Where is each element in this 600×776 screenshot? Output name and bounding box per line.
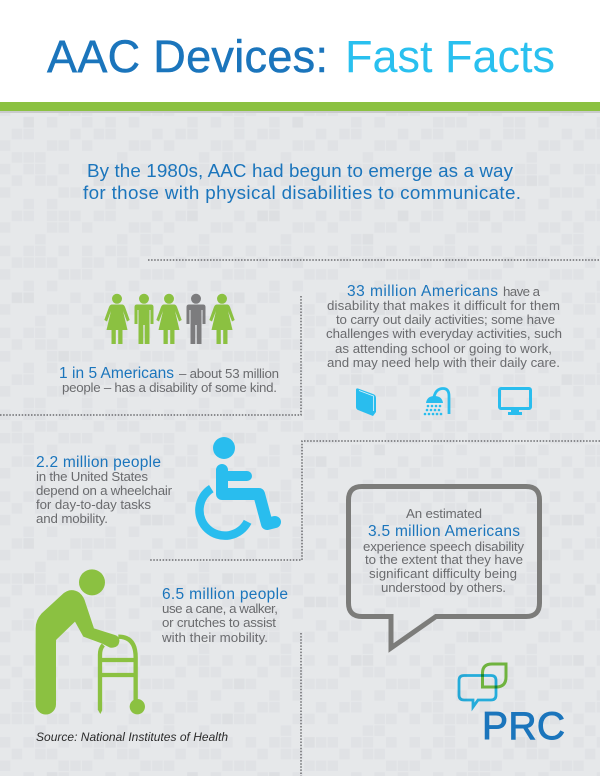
callout text: to the extent that they have	[365, 552, 523, 567]
icon: computer monitor	[500, 388, 530, 415]
text: 33 million Americans: have a	[503, 284, 541, 299]
dotted dividers	[0, 260, 600, 776]
logo wordmark: PRC	[482, 705, 565, 748]
logo speech bubble	[459, 676, 496, 707]
text: 1 in 5 Americans: – about 53 million	[179, 366, 279, 381]
title: Fast Facts	[345, 31, 555, 82]
text: 6.5 million people: 6.5 million people	[162, 586, 288, 603]
intro text: By the 1980s, AAC had begun to emerge as a way	[87, 160, 514, 181]
callout text: experience speech disability	[363, 539, 524, 554]
text: 33 million Americans: as attending school or going to work,	[335, 341, 552, 356]
text: 6.5 million people: use a cane, a walker,	[162, 601, 278, 616]
text: 33 million Americans: to carry out daily activities; some have	[336, 312, 555, 327]
callout text: 3.5 million Americans	[368, 523, 520, 540]
woman 1	[104, 294, 130, 344]
PRC logo	[459, 664, 565, 748]
icon: book	[356, 388, 376, 416]
speech bubble callout	[348, 486, 540, 648]
text: 2.2 million people: depend on a wheelchair	[36, 483, 173, 498]
man 4 grey	[186, 294, 206, 344]
intro text	[83, 160, 521, 203]
callout text: significant difficulty being	[369, 566, 517, 581]
text: 33 million Americans: and may need help with their daily care.	[327, 355, 560, 370]
icon: shower	[424, 388, 449, 415]
text: 33 million Americans: disability that makes it difficult for them	[327, 298, 560, 313]
text: 1 in 5 Americans: 1 in 5 Americans	[59, 365, 174, 382]
callout text	[363, 506, 524, 595]
text: 6.5 million people: with their mobility.	[161, 630, 268, 645]
text: 2.2 million people	[36, 454, 173, 526]
title: AAC Devices:	[47, 31, 328, 82]
header band	[0, 0, 600, 102]
icon: five people	[104, 294, 235, 344]
text: 2.2 million people: for day-to-day tasks	[36, 497, 151, 512]
text: 2.2 million people: and mobility.	[36, 511, 108, 526]
text: 2.2 million people: 2.2 million people	[36, 454, 161, 471]
text: 2.2 million people: in the United States	[36, 469, 148, 484]
icon: person with walker	[36, 569, 145, 714]
callout text: An estimated	[406, 506, 482, 521]
title	[47, 31, 555, 82]
text: 33 million Americans: 33 million Americans	[347, 283, 498, 300]
text: 6.5 million people	[161, 586, 288, 645]
text: 1 in 5 Americans: people – has a disability of some kind.	[62, 380, 277, 395]
green divider bar	[0, 102, 600, 111]
logo leaf	[482, 664, 506, 687]
callout text: understood by others.	[381, 580, 506, 595]
text: 33 million Americans: challenges with everyday activities, such	[326, 326, 562, 341]
source note: Source: National Institutes of Health	[36, 730, 228, 744]
woman 3	[156, 294, 182, 344]
text: 33 million Americans	[326, 283, 562, 370]
intro text: for those with physical disabilities to communicate.	[83, 182, 521, 203]
icon: wheelchair	[199, 437, 275, 536]
text: 6.5 million people: or crutches to assist	[162, 615, 276, 630]
man 2	[134, 294, 154, 344]
woman 5	[209, 294, 235, 344]
text: 1 in 5 Americans	[59, 365, 279, 395]
